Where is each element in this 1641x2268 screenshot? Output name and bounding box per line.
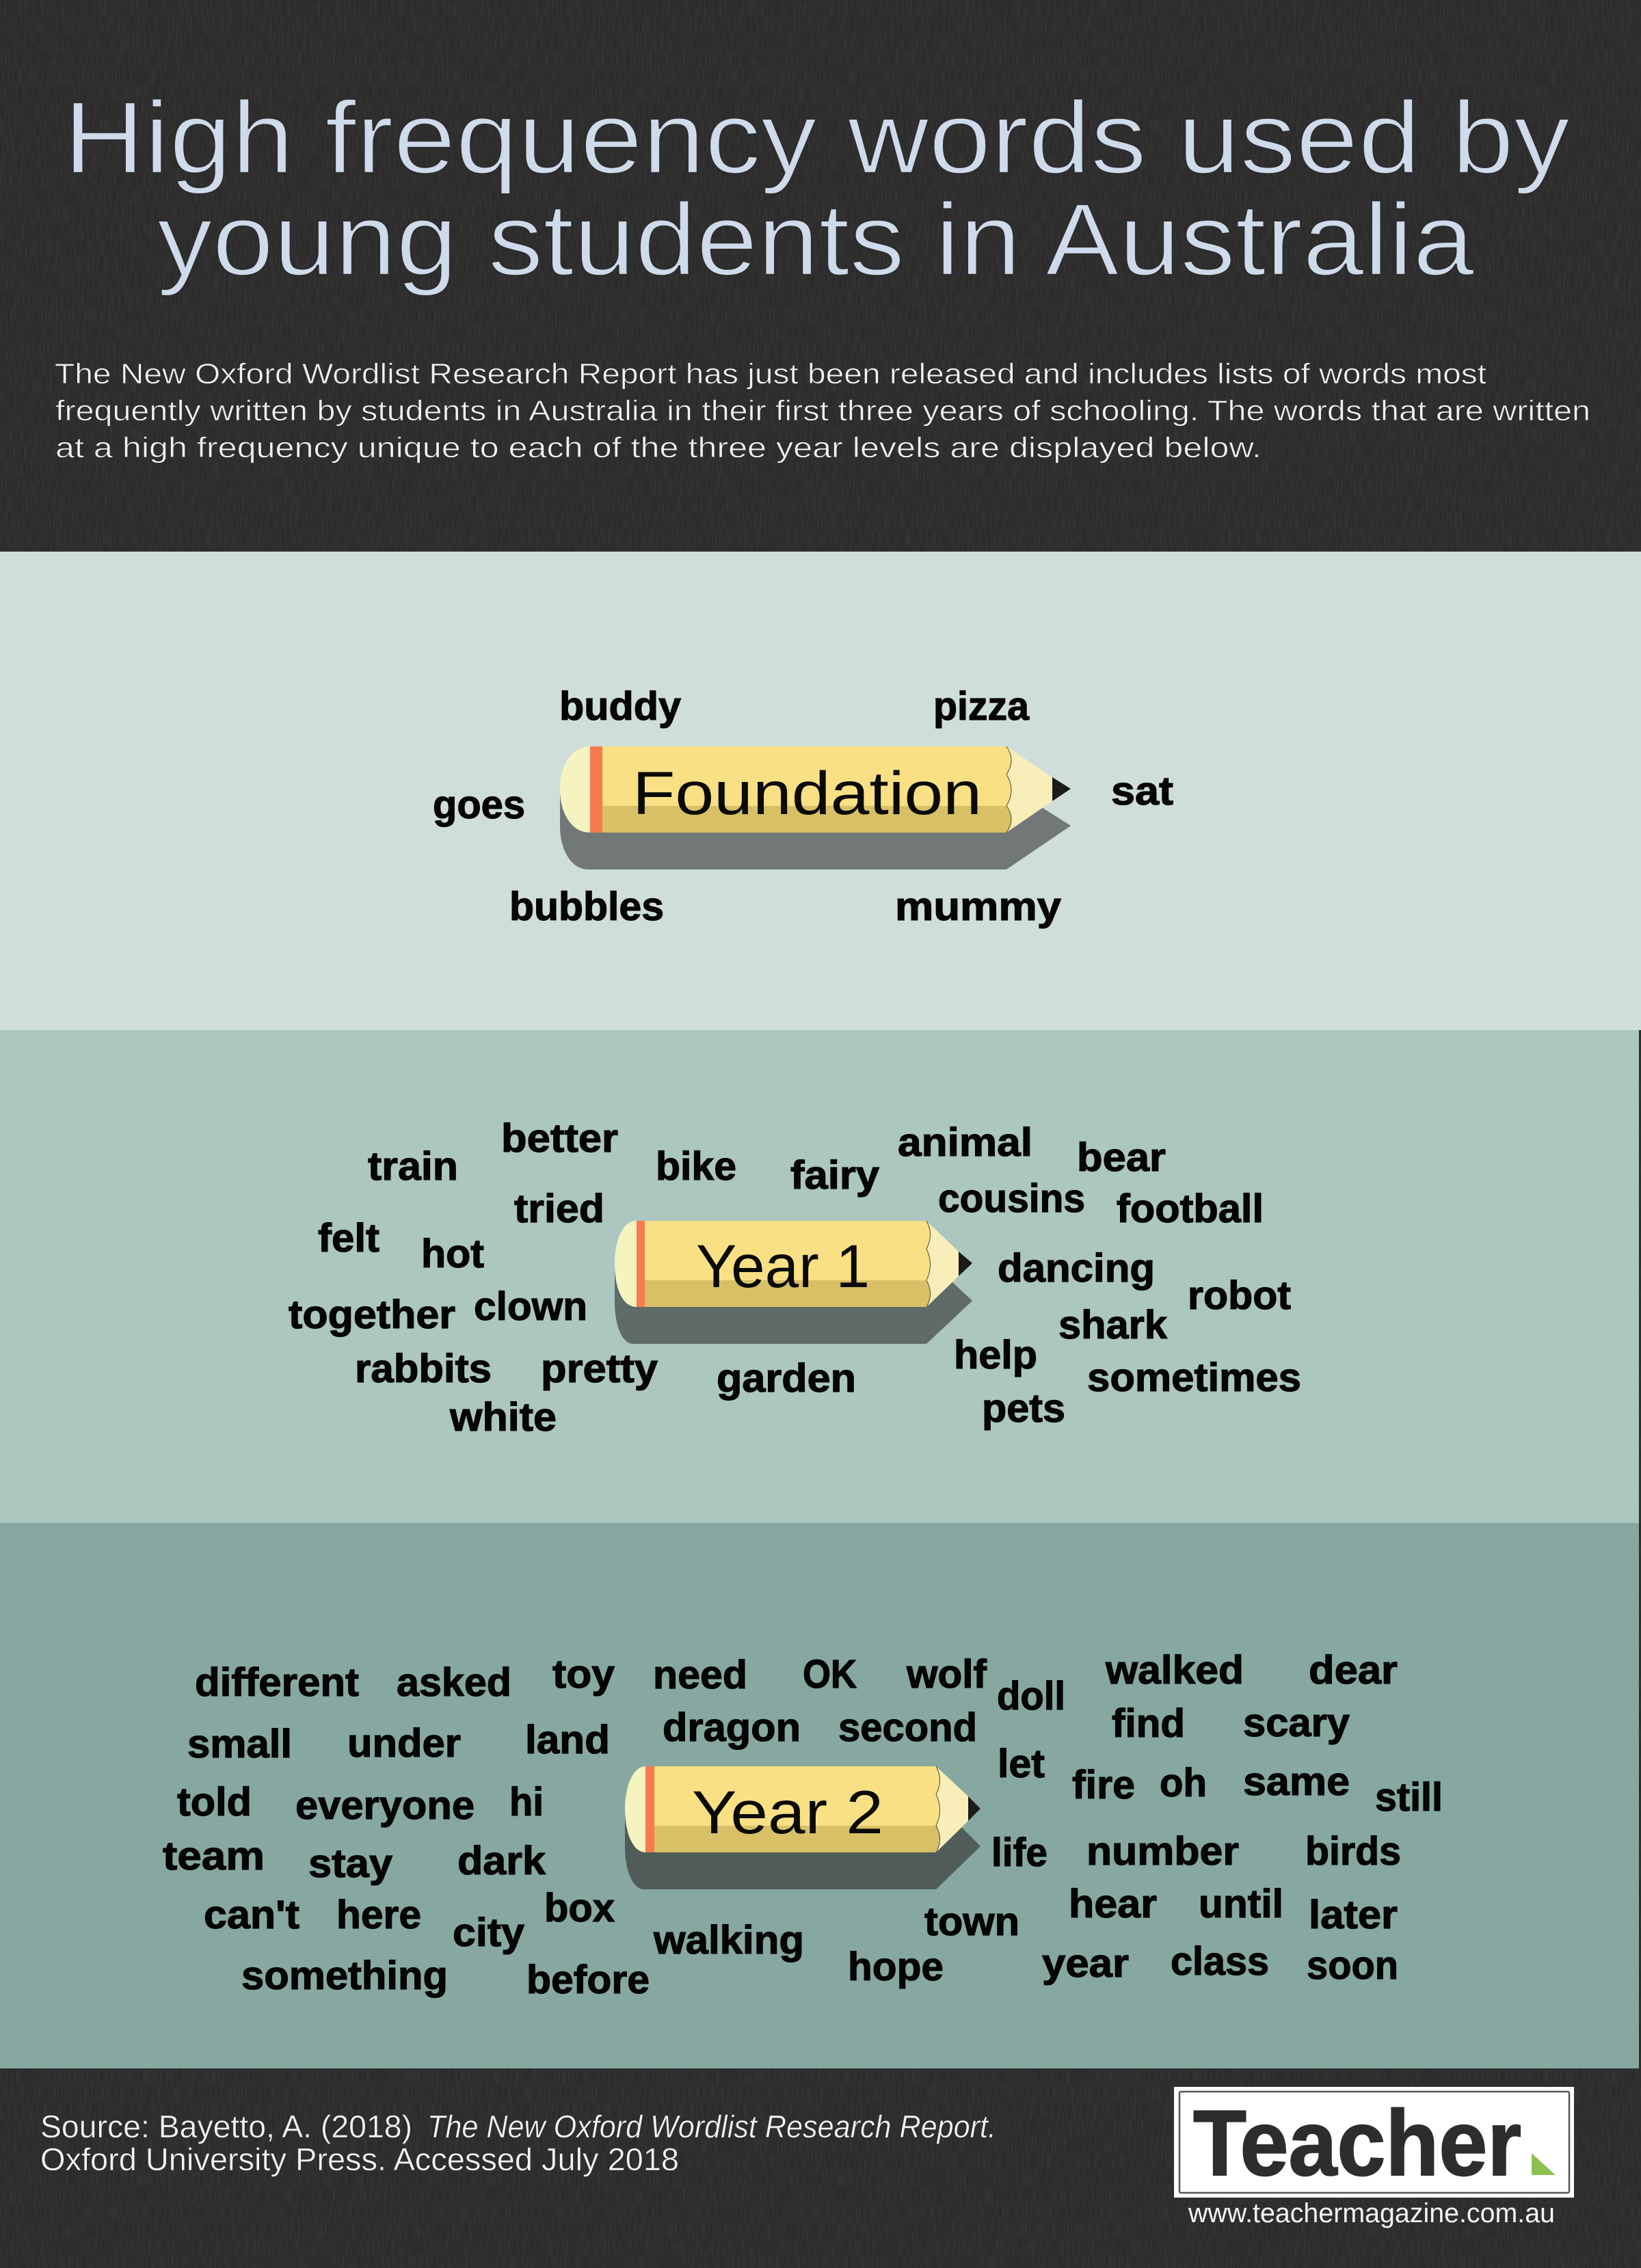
word: here (336, 1893, 421, 1937)
logo: Teacher: Teacher (1193, 2091, 1521, 2195)
word: hope (848, 1945, 944, 1989)
word: birds (1305, 1829, 1401, 1874)
word: buddy (559, 684, 681, 729)
word: pretty (541, 1347, 658, 1391)
word: bike (656, 1144, 736, 1189)
word: walked (1105, 1648, 1244, 1692)
word: year (1042, 1941, 1129, 1986)
word: walking (653, 1918, 804, 1962)
word: told (177, 1780, 252, 1824)
word: find (1112, 1701, 1185, 1746)
word: better (501, 1116, 618, 1161)
word: rabbits (355, 1347, 492, 1391)
word: train (368, 1144, 458, 1189)
word: bear (1077, 1135, 1166, 1180)
word: land (525, 1718, 610, 1762)
word: fire (1072, 1763, 1135, 1807)
word: hot (421, 1232, 484, 1276)
word: dark (457, 1839, 546, 1883)
word: city (453, 1911, 524, 1955)
pencil label: Year 2 (692, 1778, 883, 1846)
source text: Source: Bayetto, A. (2018) (40, 2109, 412, 2144)
word: small (187, 1722, 292, 1766)
word: goes (433, 783, 525, 827)
panel: Foundation (0, 552, 1641, 1030)
word: robot (1188, 1273, 1291, 1318)
pencil: Year 1 (615, 1221, 972, 1344)
word: OK (803, 1652, 857, 1697)
panel: Year 1 (0, 1030, 1639, 1523)
website url: www.teachermagazine.com.au (1188, 2198, 1555, 2228)
footer (40, 2087, 1574, 2228)
word: asked (397, 1660, 511, 1705)
word: still (1375, 1775, 1443, 1820)
pencil label: Year 1 (696, 1232, 870, 1300)
word: same (1243, 1759, 1350, 1804)
word: hear (1069, 1882, 1157, 1926)
word: dancing (998, 1246, 1155, 1291)
word: toy (552, 1652, 615, 1697)
word cloud: Year 2 (163, 1648, 1443, 2002)
pencil: Foundation (560, 746, 1071, 869)
word: need (653, 1653, 747, 1697)
word: number (1086, 1829, 1239, 1874)
word: animal (898, 1120, 1032, 1165)
pencil: Year 2 (625, 1766, 980, 1889)
word: doll (997, 1674, 1065, 1718)
pencil label: Foundation (632, 759, 982, 827)
word: sometimes (1087, 1355, 1301, 1400)
word: class (1171, 1939, 1269, 1984)
word: scary (1243, 1701, 1350, 1745)
header (55, 80, 1590, 463)
word: can't (204, 1893, 299, 1937)
word: hi (509, 1780, 544, 1824)
word: wolf (906, 1652, 987, 1697)
word: under (347, 1721, 461, 1766)
title: High frequency words used by (64, 80, 1570, 195)
source text (40, 2109, 996, 2177)
source text: Oxford University Press. Accessed July 2018 (40, 2142, 679, 2177)
word: white (449, 1395, 557, 1440)
word: mummy (895, 885, 1061, 929)
word: stay (308, 1841, 392, 1886)
word cloud: Year 1 (289, 1116, 1301, 1440)
word: something (241, 1954, 448, 1998)
word: later (1309, 1893, 1398, 1937)
word: together (289, 1293, 455, 1337)
word: box (544, 1886, 615, 1930)
word: felt (318, 1216, 379, 1260)
word: fairy (790, 1153, 879, 1198)
word: tried (514, 1187, 604, 1231)
word: town (924, 1900, 1019, 1944)
word: shark (1058, 1303, 1168, 1347)
word: pets (982, 1386, 1065, 1431)
word: second (838, 1705, 977, 1750)
word: bubbles (509, 885, 664, 929)
intro text (55, 357, 1590, 463)
word: football (1117, 1187, 1264, 1231)
word: until (1199, 1882, 1283, 1926)
intro text: frequently written by students in Australia in their first three years of schooling. The words that are written (55, 394, 1590, 427)
title: young students in Australia (157, 182, 1475, 297)
word: let (998, 1742, 1045, 1786)
intro text: The New Oxford Wordlist Research Report has just been released and includes lists of words most (55, 357, 1486, 390)
title (64, 80, 1570, 297)
word: soon (1307, 1943, 1398, 1988)
word: garden (717, 1356, 856, 1401)
word: everyone (295, 1783, 475, 1828)
source text: The New Oxford Wordlist Research Report. (427, 2109, 996, 2144)
intro text: at a high frequency unique to each of the three year levels are displayed below. (55, 431, 1262, 463)
word: life (991, 1831, 1048, 1875)
word: clown (474, 1284, 587, 1329)
word: pizza (933, 684, 1030, 729)
word: dragon (663, 1705, 801, 1750)
word: sat (1111, 769, 1173, 813)
word: dear (1309, 1648, 1398, 1692)
word: before (526, 1958, 650, 2002)
word: team (163, 1834, 265, 1878)
word cloud: Foundation (433, 684, 1173, 929)
word: help (954, 1333, 1037, 1377)
panel: Year 2 (0, 1523, 1639, 2068)
word: cousins (938, 1176, 1085, 1221)
word: oh (1160, 1761, 1207, 1805)
word: different (195, 1660, 359, 1705)
